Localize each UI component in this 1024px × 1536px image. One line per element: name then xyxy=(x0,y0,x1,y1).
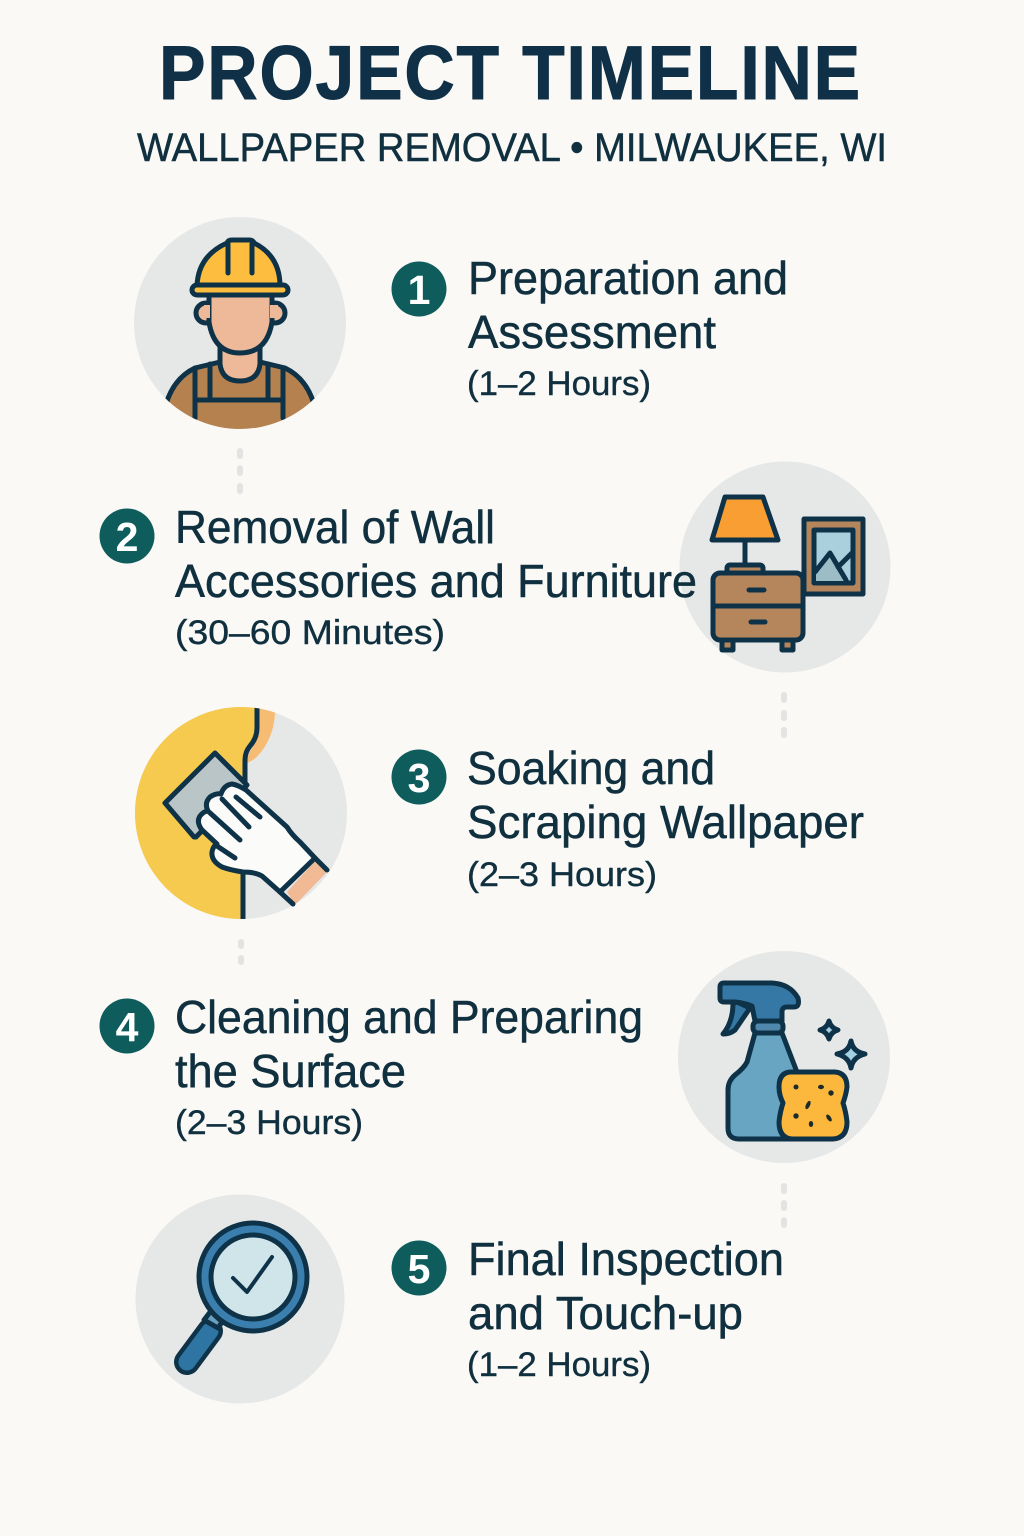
step 3 text: Soaking and xyxy=(467,742,715,794)
step 2 text: Accessories and Furniture xyxy=(175,555,697,607)
icon: lamp, nightstand and picture frame xyxy=(680,462,890,672)
step 2 text xyxy=(175,501,697,652)
icon: gloved hand scraping wallpaper xyxy=(135,707,347,919)
step 2: removal of wall accessories and furniture xyxy=(100,462,890,672)
step 3 text xyxy=(467,742,864,894)
number badge 4: 4 xyxy=(116,1004,139,1050)
step 4 text: the Surface xyxy=(175,1045,406,1097)
connector dots 2 xyxy=(781,692,787,738)
icon: magnifying glass with check mark xyxy=(136,1194,344,1404)
step 1 text: Preparation and xyxy=(468,252,788,304)
step 5: final inspection and touch-up xyxy=(136,1194,784,1404)
step 1 text: (1–2 Hours) xyxy=(467,365,651,403)
number badge 2: 2 xyxy=(116,514,138,560)
number badge 1: 1 xyxy=(408,267,430,313)
connector dots 3 xyxy=(238,939,244,965)
number badge 3 xyxy=(392,750,446,804)
number badge 4 xyxy=(100,998,154,1054)
step 2 text: (30–60 Minutes) xyxy=(175,614,445,652)
step 3 text: Scraping Wallpaper xyxy=(467,796,864,848)
step 3 text: (2–3 Hours) xyxy=(467,856,657,894)
number badge 3: 3 xyxy=(408,755,430,801)
icon: construction worker xyxy=(134,217,346,440)
step 4 text: (2–3 Hours) xyxy=(175,1104,363,1142)
subtitle: WALLPAPER REMOVAL • MILWAUKEE, WI xyxy=(137,126,887,170)
step 2 text: Removal of Wall xyxy=(175,501,495,553)
step 5 text: and Touch-up xyxy=(468,1287,743,1339)
number badge 1 xyxy=(392,262,446,316)
step 1: preparation and assessment xyxy=(134,217,788,440)
step 5 text: Final Inspection xyxy=(468,1233,784,1285)
title: PROJECT TIMELINE xyxy=(159,31,862,116)
number badge 2 xyxy=(100,508,154,564)
step 5 text: (1–2 Hours) xyxy=(467,1346,651,1384)
step 4 text: Cleaning and Preparing xyxy=(175,991,643,1043)
icon: spray bottle, sponge and sparkles xyxy=(678,951,890,1163)
step 1 text xyxy=(467,252,788,403)
number badge 5: 5 xyxy=(408,1246,430,1292)
step 4 text xyxy=(175,991,643,1142)
step 3: soaking and scraping wallpaper xyxy=(120,700,864,925)
connector dots 1 xyxy=(237,448,243,494)
step 1 text: Assessment xyxy=(468,306,716,358)
connector dots 4 xyxy=(781,1183,787,1228)
number badge 5 xyxy=(392,1240,446,1296)
step 5 text xyxy=(467,1233,784,1384)
step 4: cleaning and preparing the surface xyxy=(100,951,890,1163)
